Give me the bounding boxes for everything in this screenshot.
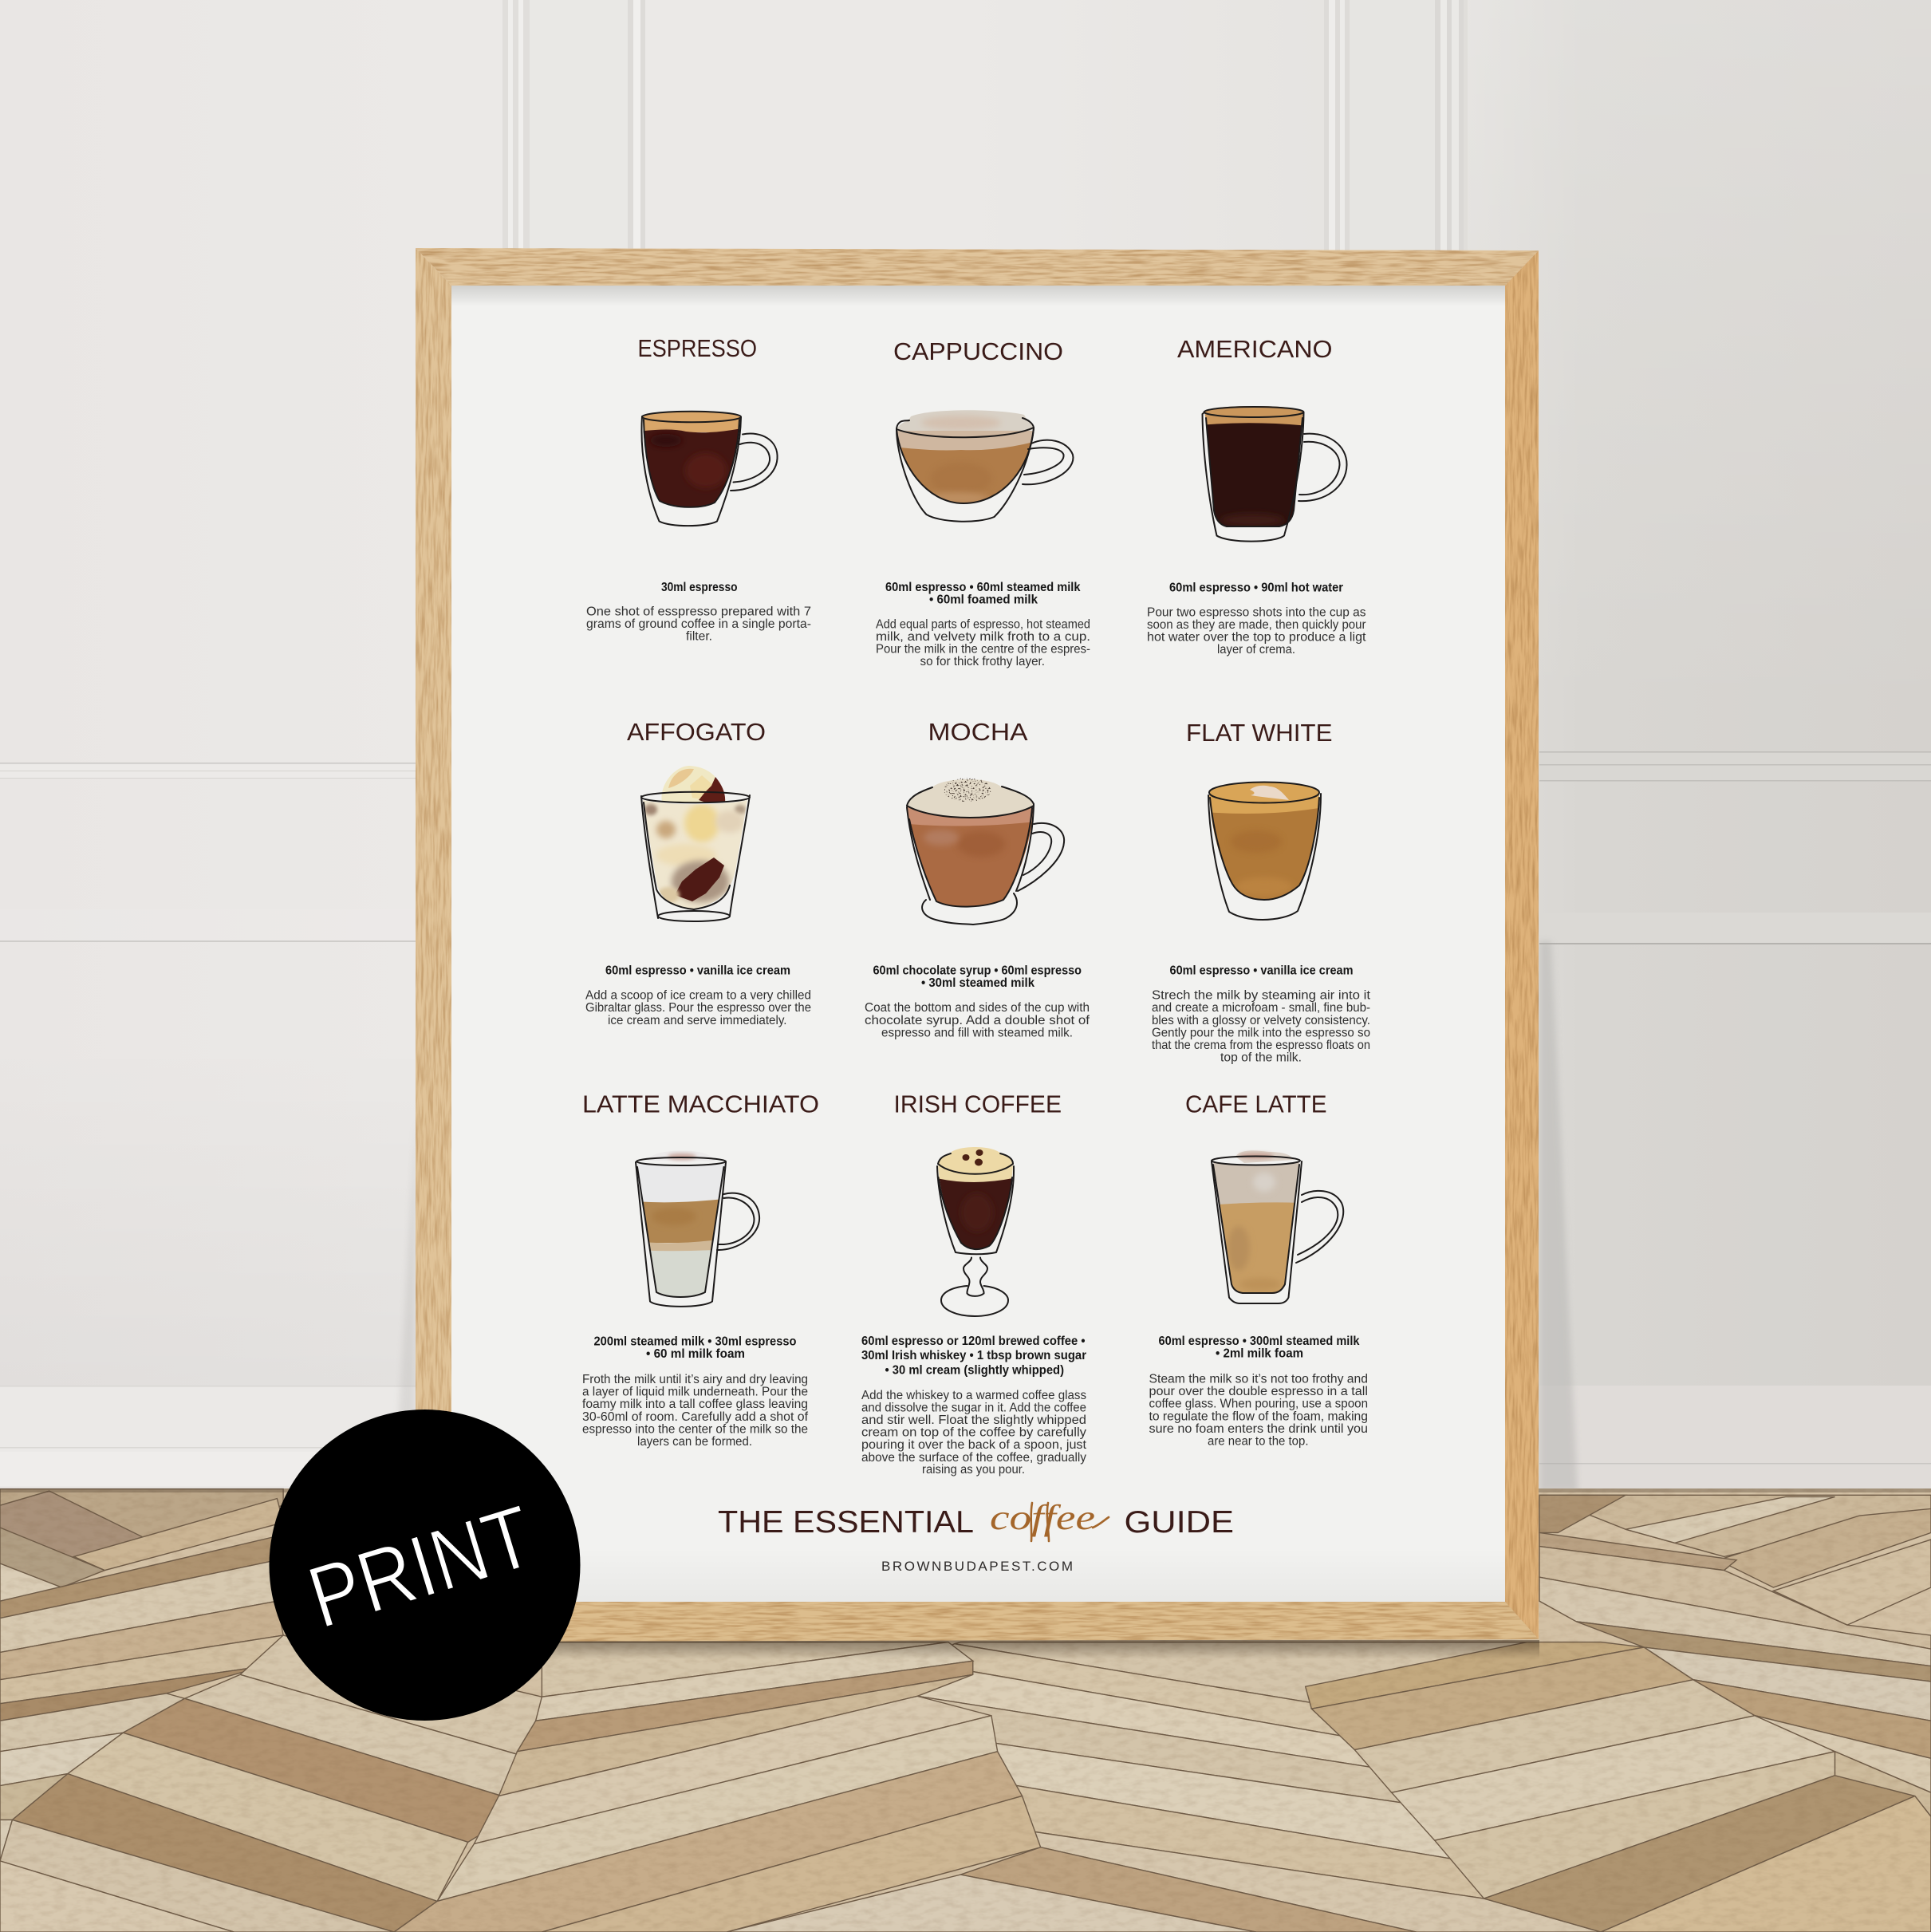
drink: espresso xyxy=(586,334,811,643)
cafe latte method: Steam the milk so it’s not too frothy and xyxy=(1149,1372,1368,1386)
affogato ingredients: 60ml espresso • vanilla ice cream xyxy=(605,964,790,978)
affogato method: ice cream and serve immediately. xyxy=(608,1014,786,1027)
mocha method: Coat the bottom and sides of the cup with xyxy=(865,1001,1090,1015)
irish coffee ingredients xyxy=(861,1335,1086,1377)
icon: cappuccino cup xyxy=(893,410,1073,522)
latte macchiato ingredients xyxy=(593,1335,796,1361)
flat white ingredients: 60ml espresso • vanilla ice cream xyxy=(1169,964,1353,978)
wooden herringbone floor xyxy=(0,1488,1931,1932)
americano method: hot water over the top to produce a ligt xyxy=(1147,630,1366,645)
flat white method: and create a microfoam - small, fine bub- xyxy=(1152,1001,1370,1015)
cafe latte ingredients: 60ml espresso • 300ml steamed milk xyxy=(1158,1335,1360,1348)
icon: cafe latte glass xyxy=(1208,1150,1343,1303)
drink: affogato xyxy=(585,718,811,1027)
affogato title: AFFOGATO xyxy=(627,718,766,746)
latte macchiato ingredients: • 60 ml milk foam xyxy=(646,1347,745,1361)
icon: irish coffee glass xyxy=(933,1147,1017,1316)
mocha method: chocolate syrup. Add a double shot of xyxy=(865,1014,1090,1027)
latte macchiato ingredients: 200ml steamed milk • 30ml espresso xyxy=(593,1335,796,1348)
irish coffee method: Add the whiskey to a warmed coffee glass xyxy=(861,1389,1086,1402)
americano method: layer of crema. xyxy=(1217,643,1295,656)
icon: flat white glass xyxy=(1204,778,1324,920)
americano method: Pour two espresso shots into the cup as xyxy=(1147,606,1366,619)
drink: latte macchiato xyxy=(582,1090,819,1449)
flat white method: Gently pour the milk into the espresso so xyxy=(1152,1026,1370,1040)
espresso method xyxy=(586,605,811,643)
affogato method: Add a scoop of ice cream to a very chilled xyxy=(585,989,811,1002)
cafe latte method: coffee glass. When pouring, use a spoon xyxy=(1149,1398,1368,1410)
latte macchiato method: a layer of liquid milk underneath. Pour the xyxy=(582,1385,808,1399)
irish coffee ingredients: • 30 ml cream (slightly whipped) xyxy=(885,1364,1064,1377)
cappuccino method: milk, and velvety milk froth to a cup. xyxy=(876,630,1090,644)
poster main title: THE ESSENTIAL xyxy=(718,1505,974,1540)
latte macchiato method: Froth the milk until it’s airy and dry leaving xyxy=(582,1373,808,1386)
affogato method: Gibraltar glass. Pour the espresso over the xyxy=(585,1001,811,1015)
poster paper xyxy=(451,286,1505,1602)
irish coffee ingredients: 30ml Irish whiskey • 1 tbsp brown sugar xyxy=(861,1349,1086,1362)
icon: affogato glass xyxy=(638,766,754,921)
espresso title: ESPRESSO xyxy=(638,334,757,362)
irish coffee method: and stir well. Float the slightly whipped xyxy=(861,1414,1086,1427)
cappuccino title: CAPPUCCINO xyxy=(893,337,1063,365)
latte macchiato method: espresso into the center of the milk so the xyxy=(582,1423,808,1436)
americano title: AMERICANO xyxy=(1177,335,1332,363)
wall xyxy=(0,0,1931,1493)
affogato method xyxy=(585,989,811,1027)
poster main title xyxy=(718,1498,1234,1541)
irish coffee title: IRISH COFFEE xyxy=(893,1090,1062,1118)
cappuccino ingredients xyxy=(885,581,1081,606)
espresso method: grams of ground coffee in a single porta- xyxy=(586,617,811,631)
print badge: PRINT xyxy=(298,1487,545,1647)
irish coffee method: cream on top of the coffee by carefully xyxy=(861,1426,1086,1439)
icon: latte macchiato glass xyxy=(634,1151,759,1307)
latte macchiato method: 30-60ml of room. Carefully add a shot of xyxy=(582,1410,809,1424)
icon: espresso cup xyxy=(638,407,778,526)
mocha ingredients: 60ml chocolate syrup • 60ml espresso xyxy=(873,964,1082,978)
latte macchiato title: LATTE MACCHIATO xyxy=(582,1090,819,1118)
latte macchiato method: foamy milk into a tall coffee glass leaving xyxy=(582,1398,808,1411)
irish coffee method: raising as you pour. xyxy=(922,1463,1025,1477)
irish coffee method xyxy=(861,1389,1087,1477)
latte macchiato method xyxy=(582,1373,809,1449)
espresso method: One shot of esspresso prepared with 7 xyxy=(586,605,811,619)
print badge xyxy=(270,1410,581,1721)
espresso ingredients: 30ml espresso xyxy=(661,581,737,594)
flat white method: top of the milk. xyxy=(1220,1051,1302,1064)
americano method: soon as they are made, then quickly pour xyxy=(1147,618,1365,632)
cafe latte method xyxy=(1149,1372,1368,1449)
americano method xyxy=(1147,606,1366,656)
drink: flat white xyxy=(1152,719,1371,1064)
americano ingredients: 60ml espresso • 90ml hot water xyxy=(1169,581,1343,595)
flat white method: Strech the milk by steaming air into it xyxy=(1152,989,1371,1002)
cappuccino method: Pour the milk in the centre of the espres- xyxy=(876,643,1090,656)
drink: irish coffee xyxy=(861,1090,1087,1477)
latte macchiato method: layers can be formed. xyxy=(637,1435,752,1449)
cappuccino method xyxy=(876,617,1090,668)
flat white title: FLAT WHITE xyxy=(1186,719,1332,747)
wooden picture frame xyxy=(416,248,1539,1642)
flat white method xyxy=(1152,989,1371,1064)
cappuccino ingredients: • 60ml foamed milk xyxy=(929,593,1038,606)
flat white method: that the crema from the espresso floats on xyxy=(1152,1039,1370,1052)
drink: mocha xyxy=(865,718,1090,1040)
drink: americano xyxy=(1147,335,1366,656)
cafe latte title: CAFE LATTE xyxy=(1185,1090,1327,1118)
cappuccino ingredients: 60ml espresso • 60ml steamed milk xyxy=(885,581,1081,594)
drink: cafe latte xyxy=(1149,1090,1368,1449)
poster main title: coffee xyxy=(990,1498,1095,1537)
irish coffee ingredients: 60ml espresso or 120ml brewed coffee • xyxy=(861,1335,1085,1348)
flat white method: bles with a glossy or velvety consistency. xyxy=(1152,1014,1370,1027)
mocha title: MOCHA xyxy=(928,718,1028,746)
cafe latte method: to regulate the flow of the foam, making xyxy=(1149,1410,1368,1423)
icon: mocha cup xyxy=(901,778,1064,925)
cappuccino method: Add equal parts of espresso, hot steamed xyxy=(876,617,1090,632)
mocha ingredients: • 30ml steamed milk xyxy=(921,976,1034,990)
poster main title: GUIDE xyxy=(1125,1505,1234,1540)
mocha method xyxy=(865,1001,1090,1040)
cafe latte method: sure no foam enters the drink until you xyxy=(1149,1422,1368,1436)
website credit: BROWNBUDAPEST.COM xyxy=(881,1559,1073,1574)
cafe latte ingredients xyxy=(1158,1335,1360,1361)
cappuccino method: so for thick frothy layer. xyxy=(920,655,1045,668)
cafe latte ingredients: • 2ml milk foam xyxy=(1216,1346,1303,1361)
irish coffee method: above the surface of the coffee, gradually xyxy=(861,1451,1086,1465)
mocha ingredients xyxy=(873,964,1082,990)
irish coffee method: pouring it over the back of a spoon, just xyxy=(861,1438,1087,1452)
espresso method: filter. xyxy=(686,630,712,643)
cafe latte method: pour over the double espresso in a tall xyxy=(1149,1385,1368,1398)
cafe latte method: are near to the top. xyxy=(1208,1434,1308,1449)
icon: americano cup xyxy=(1200,403,1347,542)
drink: cappuccino xyxy=(876,337,1090,668)
irish coffee method: and dissolve the sugar in it. Add the coffee xyxy=(861,1401,1086,1415)
mocha method: espresso and fill with steamed milk. xyxy=(881,1026,1073,1040)
